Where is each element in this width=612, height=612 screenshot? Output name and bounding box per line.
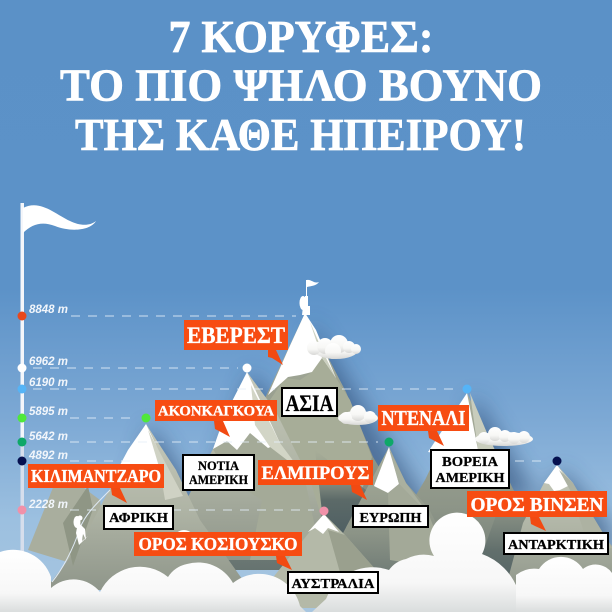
small cloud top behind label [173,530,195,552]
height labels: 5642 m [29,431,68,443]
mountain: Elbrus [320,447,470,590]
label: Everest: ΕΒΕΡΕΣΤ [187,323,285,348]
icon: climber on the wall [74,516,88,545]
label: Antarctica: ΑΝΤΑΡΚΤΙΚΗ [508,537,605,552]
label: Elbrus [258,460,373,500]
label: South America: ΝΟΤΙΑ [198,459,239,473]
label: Africa [104,506,173,529]
label: Kilimanjaro: ΚΙΛΙΜΑΝΤΖΑΡΟ [31,466,161,486]
mountain: Everest [200,313,440,570]
label: Kilimanjaro [28,464,164,503]
dashed height lines [33,316,546,510]
label: Australia: ΑΥΣΤΡΑΛΙΑ [292,577,375,592]
foreground cloud: left [0,550,306,612]
label: South America: ΑΜΕΡΙΚΗ [189,473,248,487]
mountain: Aconcagua [188,372,335,560]
label: Europe: ΕΥΡΩΠΗ [360,511,422,526]
label: Vinson [467,491,607,531]
flag pole with flag [20,203,96,553]
label: Africa: ΑΦΡΙΚΗ [109,511,168,526]
label: South America [183,455,254,490]
label: Denali: ΝΤΕΝΑΛΙ [382,406,466,430]
label: Everest [184,320,288,365]
height labels: 6962 m [29,356,68,368]
label: Australia [288,572,378,593]
title: 7 ΚΟΡΥΦΕΣ: [168,11,434,62]
mountain shadows [120,320,612,560]
title: ΤΟ ΠΙΟ ΨΗΛΟ ΒΟΥΝΟ [60,60,542,110]
label: North America [431,450,509,488]
label: North America: ΑΜΕΡΙΚΗ [436,471,505,486]
label: Denali [378,405,469,446]
small cloud near Everest [307,335,361,359]
icon: climber with flag on Everest summit [300,280,319,315]
label: Kosciuszko: ΟΡΟΣ ΚΟΣΙΟΥΣΚΟ [138,534,298,554]
mountain: Denali [395,393,540,590]
mountain: Vinson [505,465,612,590]
label: Aconcagua [155,400,277,437]
title: ΤΗΣ ΚΑΘΕ ΗΠΕΙΡΟΥ! [75,109,526,160]
mountain: Kosciuszko [250,514,395,608]
height labels: 5895 m [29,406,68,418]
small cloud near Denali [475,427,533,446]
height labels: 4892 m [28,450,68,462]
foreground cloud: far right [516,557,612,612]
label: Aconcagua: ΑΚΟΝΚΑΓΚΟΥΑ [158,404,274,420]
dark valley shading [315,450,540,590]
height marker dots on the pole and peaks [18,312,562,516]
title [60,11,542,160]
height labels [28,304,68,511]
label: Europe [353,506,428,527]
label: Elbrus: ΕΛΜΠΡΟΥΣ [262,463,370,484]
label: Kosciuszko [134,532,302,570]
climber rope [52,490,110,582]
height labels: 6190 m [29,377,68,389]
foreground cloud: right large [312,513,518,612]
height labels: 2228 m [28,499,68,511]
label: North America: ΒΟΡΕΙΑ [442,455,499,470]
label: Antarctica [504,533,608,554]
height labels: 8848 m [29,304,68,316]
mountain: Kilimanjaro with left ridge [28,424,250,590]
label: Vinson: ΟΡΟΣ ΒΙΝΣΕΝ [470,494,604,516]
label: Asia: ΑΣΙΑ [286,391,334,416]
small cloud near Asia label [338,405,378,425]
